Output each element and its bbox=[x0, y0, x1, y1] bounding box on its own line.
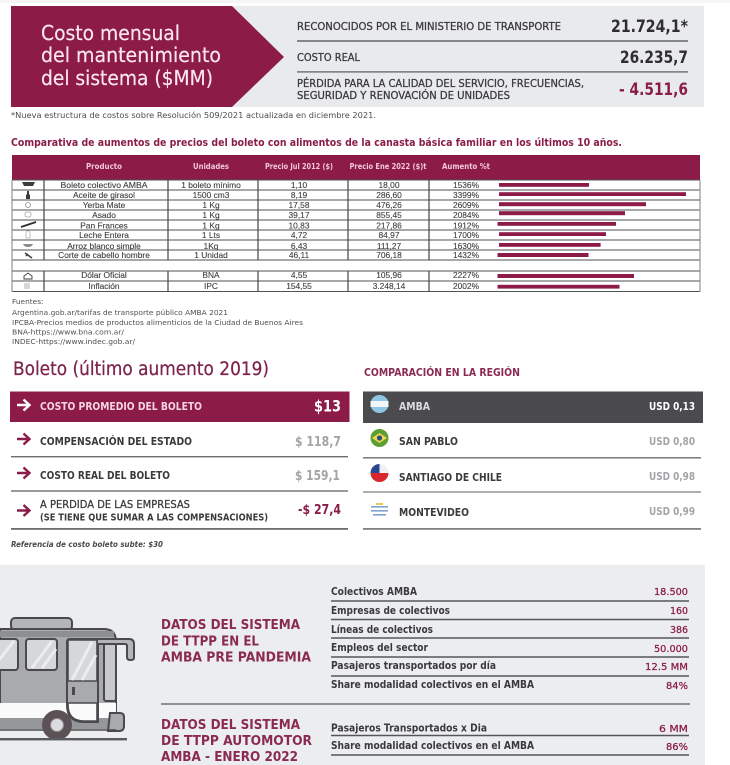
row: aceite: 1500 cm3 bbox=[193, 190, 230, 200]
sources: IPCBA-Precios medios de productos alimenticios de la Ciudad de Buenos Aires bbox=[12, 318, 303, 327]
stats: enero 2022: 86% bbox=[666, 742, 688, 753]
icon: bus bbox=[0, 618, 134, 740]
flag: chile bbox=[370, 464, 388, 482]
row: leche: 84,97 bbox=[379, 230, 400, 240]
stats: pre pandemia: Pasajeros transportados por día bbox=[331, 660, 496, 672]
row: amba: USD 0,13 bbox=[649, 401, 695, 413]
row: boleto: Boleto colectivo AMBA bbox=[60, 180, 148, 190]
row: perdida empresas: (SE TIENE QUE SUMAR A LAS COMPENSACIONES) bbox=[40, 512, 268, 524]
table header: Unidades bbox=[193, 162, 229, 171]
row: yerba: 2609% bbox=[453, 200, 480, 210]
sources: Argentina.gob.ar/tarifas de transporte público AMBA 2021 bbox=[12, 308, 228, 317]
heading: pre pandemia: DATOS DEL SISTEMA bbox=[161, 618, 301, 633]
row: montevideo: MONTEVIDEO bbox=[399, 507, 469, 519]
stats: pre pandemia: 12.5 MM bbox=[645, 662, 688, 673]
sources: INDEC-https://www.indec.gob.ar/ bbox=[12, 337, 136, 346]
row: dolar: 105,96 bbox=[376, 270, 402, 280]
boleto heading: Boleto (último aumento 2019) bbox=[13, 359, 269, 380]
icons: table rows bbox=[21, 180, 36, 289]
stats: pre pandemia: Share modalidad colectivos en el AMBA bbox=[331, 679, 534, 691]
title arrow banner: del sistema ($MM) bbox=[41, 66, 213, 90]
row: pan: 10,83 bbox=[289, 220, 310, 230]
row: dolar bbox=[81, 270, 634, 280]
row: yerba: Yerba Mate bbox=[83, 200, 126, 210]
row: boleto: 1536% bbox=[453, 180, 480, 190]
row: costo real boleto: $ 159,1 bbox=[295, 469, 340, 484]
stats: pre pandemia: Líneas de colectivos bbox=[331, 624, 433, 636]
row: reconocidos bbox=[297, 17, 688, 42]
stats: pre pandemia: 18.500 bbox=[654, 587, 688, 598]
row: yerba bbox=[83, 200, 646, 210]
row: san pablo: SAN PABLO bbox=[399, 436, 458, 448]
row: pan: 1912% bbox=[453, 220, 480, 230]
sources: BNA-https://www.bna.com.ar/ bbox=[12, 328, 125, 336]
heading: pre pandemia: DE TTPP EN EL bbox=[161, 634, 260, 650]
title arrow banner: Costo mensual bbox=[41, 21, 180, 45]
heading: pre pandemia bbox=[161, 618, 312, 666]
stats: pre pandemia bbox=[331, 586, 689, 692]
row: san pablo bbox=[363, 429, 701, 459]
row: yerba: 17,58 bbox=[289, 200, 310, 210]
comparison heading: COMPARACIÓN EN LA REGIÓN bbox=[364, 366, 520, 379]
panel: datos del sistema bbox=[0, 565, 705, 765]
title arrow banner: del mantenimiento bbox=[41, 43, 221, 67]
row: corte: 46,11 bbox=[289, 250, 310, 260]
title arrow banner bbox=[11, 6, 284, 107]
panel: price comparison table bbox=[12, 155, 700, 292]
stats: enero 2022: 6 MM bbox=[659, 724, 688, 735]
stats: enero 2022: Pasajeros Transportados x Dia bbox=[331, 722, 487, 734]
row: san pablo: USD 0,80 bbox=[649, 436, 695, 448]
row: costo real boleto bbox=[11, 468, 348, 492]
row: compensacion bbox=[11, 434, 348, 457]
row: leche: 4,72 bbox=[291, 230, 307, 240]
heading: enero 2022: AMBA - ENERO 2022 bbox=[161, 750, 298, 765]
panel: comparacion region bbox=[363, 366, 703, 530]
boleto note: Referencia de costo boleto subte: $30 bbox=[11, 539, 163, 549]
row: arroz: 6,43 bbox=[291, 241, 307, 251]
row: compensacion: COMPENSACIÓN DEL ESTADO bbox=[40, 435, 192, 448]
row: boleto: 18,00 bbox=[379, 180, 400, 190]
stats: pre pandemia: 50.000 bbox=[654, 644, 688, 655]
row: aceite: 3399% bbox=[453, 190, 480, 200]
row: yerba: 476,26 bbox=[376, 200, 402, 210]
row: leche: 1700% bbox=[453, 230, 480, 240]
row: pan: 1 Kg bbox=[202, 220, 220, 230]
row: asado: 2084% bbox=[453, 210, 480, 220]
stats: enero 2022: Share modalidad colectivos en el AMBA bbox=[331, 740, 534, 752]
row: pan: 217,86 bbox=[376, 220, 402, 230]
row: costo real boleto: COSTO REAL DEL BOLETO bbox=[40, 470, 170, 482]
row: inflacion: 154,55 bbox=[286, 281, 312, 291]
row: aceite: 8,19 bbox=[291, 190, 307, 200]
row: compensacion: $ 118,7 bbox=[295, 435, 341, 450]
row: perdida empresas: -$ 27,4 bbox=[298, 503, 341, 518]
row: perdida: SEGURIDAD Y RENOVACIÓN DE UNIDADES bbox=[297, 89, 510, 102]
heading: enero 2022: DE TTPP AUTOMOTOR bbox=[161, 734, 312, 749]
row: montevideo: USD 0,99 bbox=[649, 506, 695, 518]
row: arroz: Arroz blanco simple bbox=[67, 241, 141, 251]
panel: boleto bbox=[10, 359, 350, 549]
footnote: *Nueva estructura de costos sobre Resolución 509/2021 actualizada en diciembre 2021. bbox=[11, 110, 376, 120]
row: santiago: SANTIAGO DE CHILE bbox=[399, 472, 502, 484]
flag: brasil bbox=[370, 429, 388, 447]
row: corte: 1 Unidad bbox=[194, 250, 228, 260]
row: pan bbox=[80, 220, 616, 230]
row: inflacion: 3.248,14 bbox=[373, 281, 406, 291]
row: leche: Leche Entera bbox=[79, 230, 129, 240]
row: costo real: COSTO REAL bbox=[297, 53, 360, 64]
row: inflacion: Inflación bbox=[88, 281, 120, 291]
row: santiago bbox=[363, 464, 701, 493]
stats: pre pandemia: 84% bbox=[666, 681, 688, 692]
row: asado bbox=[92, 210, 625, 220]
stats: pre pandemia: Colectivos AMBA bbox=[331, 586, 417, 598]
row: reconocidos: RECONOCIDOS POR EL MINISTERIO DE TRANSPORTE bbox=[297, 22, 561, 33]
heading: enero 2022: DATOS DEL SISTEMA bbox=[161, 718, 301, 733]
row: yerba: 1 Kg bbox=[202, 200, 220, 210]
row: dolar: Dólar Oficial bbox=[81, 270, 127, 280]
row: dolar: 4,55 bbox=[291, 270, 307, 280]
row: perdida empresas bbox=[11, 499, 348, 530]
table header: Aumento %t bbox=[442, 162, 490, 171]
row: corte: 1432% bbox=[453, 250, 480, 260]
flag: argentina bbox=[370, 395, 388, 413]
panel: costo mensual bbox=[11, 6, 704, 107]
row: asado: 1 Kg bbox=[202, 210, 220, 220]
row: costo promedio: COSTO PROMEDIO DEL BOLETO bbox=[40, 401, 202, 413]
row: corte: Corte de cabello hombre bbox=[58, 250, 150, 260]
row: aceite: Aceite de girasol bbox=[73, 190, 135, 200]
row: arroz: 1Kg bbox=[204, 241, 219, 251]
table header: Precio Ene 2022 ($)t bbox=[350, 162, 427, 171]
row: perdida: - 4.511,6 bbox=[619, 80, 688, 99]
table header: Precio Jul 2012 ($) bbox=[265, 162, 333, 171]
row: boleto: 1 boleto mínimo bbox=[181, 180, 241, 190]
row: asado: Asado bbox=[92, 210, 116, 220]
row: costo promedio bbox=[10, 392, 350, 422]
row: amba bbox=[363, 392, 703, 423]
table heading: Comparativa de aumentos de precios del boleto con alimentos de la canasta básica familiar en los últimos 10 años. bbox=[11, 137, 622, 149]
row: arroz bbox=[67, 241, 601, 251]
row: dolar: BNA bbox=[202, 270, 220, 280]
heading: enero 2022 bbox=[161, 718, 312, 765]
stats: pre pandemia: Empleos del sector bbox=[331, 642, 429, 654]
row: asado: 39,17 bbox=[289, 210, 310, 220]
row: leche: 1 Lts bbox=[202, 230, 220, 240]
stats: enero 2022 bbox=[331, 722, 689, 755]
row: inflacion: 2002% bbox=[453, 281, 480, 291]
flag: uruguay bbox=[371, 503, 388, 516]
heading: pre pandemia: AMBA PRE PANDEMIA bbox=[161, 650, 312, 666]
row: leche bbox=[79, 230, 606, 240]
row: reconocidos: 21.724,1* bbox=[611, 17, 688, 36]
stats: pre pandemia: 386 bbox=[670, 625, 688, 636]
row: dolar: 2227% bbox=[453, 270, 480, 280]
row: inflacion bbox=[88, 281, 620, 291]
row: costo real: 26.235,7 bbox=[620, 48, 688, 67]
row: corte: 706,18 bbox=[376, 250, 402, 260]
row: perdida bbox=[297, 77, 688, 102]
row: costo real bbox=[297, 48, 688, 73]
table header: Producto bbox=[86, 162, 123, 171]
row: montevideo bbox=[363, 503, 701, 530]
sources: Fuentes: bbox=[12, 297, 44, 306]
row: aceite: 286,60 bbox=[376, 190, 402, 200]
row: arroz: 1630% bbox=[453, 241, 480, 251]
table header bbox=[12, 155, 700, 180]
row: costo promedio: $13 bbox=[314, 396, 341, 416]
row: arroz: 111,27 bbox=[377, 241, 402, 251]
stats: pre pandemia: Empresas de colectivos bbox=[331, 605, 450, 617]
row: asado: 855,45 bbox=[376, 210, 402, 220]
row: perdida: PÉRDIDA PARA LA CALIDAD DEL SERVICIO, FRECUENCIAS, bbox=[297, 77, 584, 90]
sources bbox=[12, 297, 303, 346]
row: boleto: 1,10 bbox=[291, 180, 307, 190]
row: inflacion: IPC bbox=[204, 281, 218, 291]
row: perdida empresas: A PERDIDA DE LAS EMPRESAS bbox=[40, 499, 190, 511]
row: pan: Pan Frances bbox=[80, 220, 128, 230]
row: boleto bbox=[60, 180, 589, 190]
row: santiago: USD 0,98 bbox=[649, 471, 695, 483]
row: amba: AMBA bbox=[399, 401, 431, 413]
row: aceite bbox=[73, 190, 686, 200]
stats: pre pandemia: 160 bbox=[670, 606, 688, 617]
row: corte bbox=[58, 250, 588, 260]
